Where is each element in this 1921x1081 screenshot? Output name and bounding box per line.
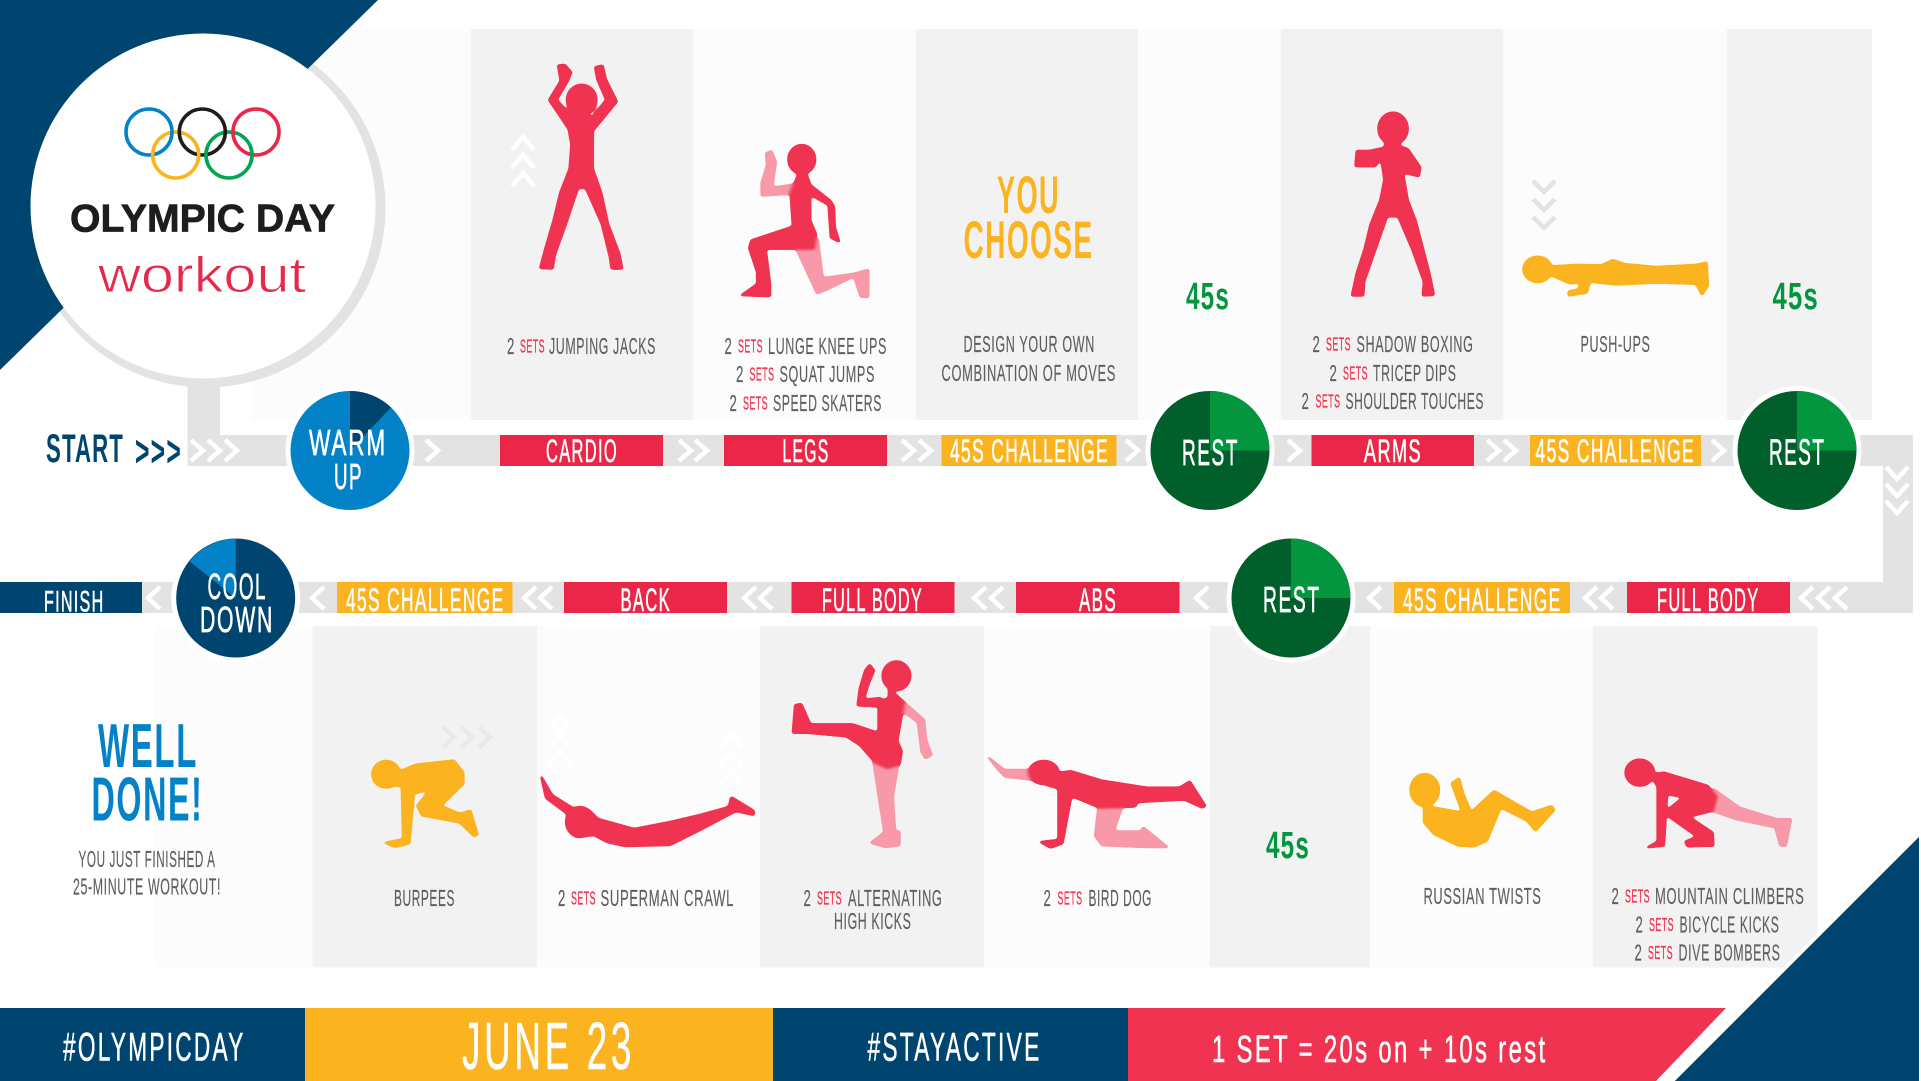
exercise: jumping jacks (507, 65, 656, 359)
label: back (564, 582, 727, 618)
label: finish (0, 582, 142, 618)
timer: rest 3: REST (1263, 579, 1320, 620)
exercise: arms (1302, 113, 1484, 414)
exercise text (1302, 331, 1484, 414)
message: well done (73, 712, 221, 900)
exercise text: 2 (1330, 360, 1338, 386)
footer: olympicday hashtag: #OLYMPICDAY (63, 1026, 246, 1070)
timer: rest 2 (1732, 386, 1862, 515)
exercise text: 2 (1634, 940, 1642, 966)
blue corner triangle top-left (0, 0, 378, 370)
timer: warm up: WARM (309, 422, 387, 463)
logo circle (30, 34, 376, 378)
exercise text: SETS (520, 336, 545, 356)
exercise: bird dog (988, 757, 1205, 911)
heading: you choose: CHOOSE (964, 211, 1094, 270)
exercise text: 2 (724, 333, 732, 359)
label: 45s challenge (1530, 433, 1701, 469)
heading: you choose (964, 166, 1094, 270)
exercise text: 2 (1312, 331, 1320, 357)
exercise text: 2 (730, 390, 738, 416)
exercise text: SETS (1648, 943, 1673, 963)
title: workout: workout (97, 247, 306, 303)
exercise text (1044, 885, 1152, 911)
exercise text: SETS (1649, 915, 1674, 935)
exercise text: SETS (743, 394, 768, 414)
timer: rest 1 (1146, 386, 1274, 515)
exercise text: DIVE BOMBERS (1678, 940, 1780, 966)
exercise text: SETS (1625, 886, 1650, 906)
exercise text: SETS (817, 888, 842, 908)
panel: bottom row background panels (154, 626, 1818, 968)
icon: superman figure (541, 776, 754, 846)
icon: push-up figure (1523, 257, 1708, 296)
timer: rest 2: REST (1769, 432, 1826, 472)
exercise text: 2 (736, 361, 744, 387)
exercise text (942, 331, 1116, 386)
label: legs: LEGS (782, 433, 830, 469)
icon: bird dog figure (988, 757, 1205, 848)
label: abs (1016, 582, 1180, 618)
exercise text: JUMPING JACKS (549, 333, 656, 359)
panel: top row background panels (251, 29, 1872, 420)
icon: burpee figure (372, 761, 478, 847)
footer: olympicday hashtag (0, 1008, 305, 1081)
label: arms: ARMS (1364, 433, 1422, 469)
icon: lunge figure (742, 145, 868, 297)
exercise text: DESIGN YOUR OWN (964, 331, 1095, 357)
timer: cool down: COOL (208, 566, 267, 607)
text: finished (73, 846, 221, 900)
exercise: russian twists (1410, 774, 1554, 909)
exercise: you choose (942, 166, 1116, 386)
arrows: right column chevrons (1886, 467, 1908, 513)
title: olympic day: OLYMPIC DAY (70, 198, 335, 240)
exercise text: RUSSIAN TWISTS (1424, 883, 1542, 909)
timer: cool down: DOWN (200, 599, 274, 640)
timer: cool down (171, 534, 300, 662)
footer bar (0, 1008, 1726, 1081)
exercise text: SQUAT JUMPS (780, 361, 875, 387)
label: 45s challenge (337, 582, 512, 618)
route track (0, 28, 1913, 613)
icon: jumping jacks figure (540, 65, 622, 269)
footer: set definition (1128, 1008, 1726, 1081)
label: full body (1627, 582, 1790, 618)
exercise text (804, 885, 942, 934)
exercise text: BIRD DOG (1088, 885, 1152, 911)
icon: mountain climber figure (1626, 760, 1791, 847)
label: 45s challenge (942, 433, 1116, 469)
label: 45s challenge (1394, 582, 1570, 618)
exercise text: 2 (507, 333, 515, 359)
heading: you choose: YOU (997, 166, 1060, 225)
heading: well done: WELL (98, 712, 198, 781)
label: 45s challenge: 45S CHALLENGE (1536, 433, 1695, 469)
exercise text: BURPEES (394, 885, 455, 911)
exercise: push-ups (1523, 257, 1708, 357)
start label: START (46, 427, 124, 471)
footer: set definition: 1 SET = 20s on + 10s rest (1212, 1029, 1548, 1071)
label: arms (1312, 433, 1474, 469)
text: finished: YOU JUST FINISHED A (78, 846, 216, 872)
rest time: 45s: 45s (1266, 825, 1310, 867)
exercise text: 2 (1044, 885, 1052, 911)
label: finish: FINISH (44, 586, 104, 618)
label: back: BACK (620, 582, 671, 618)
timer: warm up: UP (334, 456, 363, 497)
exercise text: 2 (1612, 883, 1620, 909)
exercise text: HIGH KICKS (834, 908, 912, 934)
exercise text: TRICEP DIPS (1373, 360, 1456, 386)
heading: well done: DONE! (92, 766, 204, 834)
start label: >>> (135, 427, 182, 476)
exercise: burpees (372, 761, 478, 911)
exercise text: SUPERMAN CRAWL (600, 885, 734, 911)
exercise text: SETS (1316, 392, 1340, 412)
exercise text: SETS (571, 888, 596, 908)
exercise: superman crawl (541, 776, 754, 911)
exercise: high kicks (793, 661, 942, 934)
timer: rest 1: REST (1182, 432, 1239, 473)
label: 45s challenge: 45S CHALLENGE (950, 433, 1109, 469)
rest time: 45s: 45s (1772, 276, 1819, 318)
exercise text (1612, 883, 1804, 966)
exercise: full body (1612, 760, 1804, 966)
blue corner triangle bottom-right (1668, 832, 1921, 1081)
stage labels: lower row (0, 582, 1790, 618)
exercise text (558, 885, 734, 911)
exercise text: SHADOW BOXING (1356, 331, 1474, 357)
olympic rings (126, 109, 279, 178)
exercise text: SPEED SKATERS (773, 390, 882, 416)
icon: russian twist figure (1410, 774, 1554, 846)
text: finished: 25-MINUTE WORKOUT! (73, 874, 221, 900)
exercise text: SETS (1343, 364, 1368, 384)
label: abs: ABS (1079, 582, 1117, 618)
label: cardio (500, 433, 663, 469)
stage labels: top row (500, 433, 1701, 469)
rest time: 45s: 45s (1186, 276, 1230, 318)
label: full body: FULL BODY (1657, 582, 1760, 618)
label: full body: FULL BODY (822, 582, 923, 618)
arrows: exercise motion chevrons (443, 137, 1555, 785)
icon: shadow boxing figure (1352, 113, 1434, 296)
footer: date (305, 1008, 773, 1081)
exercise text: ALTERNATING (848, 885, 942, 911)
timer: warm up (286, 386, 414, 515)
exercise text: COMBINATION OF MOVES (942, 360, 1116, 386)
exercise text: LUNGE KNEE UPS (768, 333, 887, 359)
exercise text: SETS (1326, 334, 1351, 354)
label: legs (724, 433, 887, 469)
exercise text: SETS (1058, 888, 1082, 908)
exercise text (507, 333, 656, 359)
heading: well done (92, 712, 204, 834)
exercise text (724, 333, 887, 416)
exercise text: 2 (1636, 912, 1644, 938)
exercise text: SHOULDER TOUCHES (1346, 388, 1484, 414)
exercise text: SETS (750, 364, 774, 384)
arrows: top row chevrons (191, 440, 1724, 461)
footer: stayactive hashtag: #STAYACTIVE (868, 1026, 1042, 1070)
label: 45s challenge: 45S CHALLENGE (1403, 582, 1562, 618)
exercise text: 2 (804, 885, 812, 911)
footer: stayactive hashtag (773, 1008, 1128, 1081)
exercise text: MOUNTAIN CLIMBERS (1655, 883, 1804, 909)
label: full body (792, 582, 954, 618)
exercise text: PUSH-UPS (1580, 331, 1650, 357)
exercise text: BICYCLE KICKS (1680, 912, 1780, 938)
exercise text: 2 (1302, 388, 1310, 414)
timer: rest 3 (1226, 534, 1356, 662)
icon: high kick figure (793, 661, 932, 847)
label: 45s challenge: 45S CHALLENGE (346, 582, 504, 618)
label: cardio: CARDIO (546, 433, 618, 469)
exercise text: 2 (558, 885, 566, 911)
arrows: lower row chevrons (148, 587, 1847, 609)
exercise: legs (724, 145, 887, 416)
exercise text: SETS (738, 336, 763, 356)
